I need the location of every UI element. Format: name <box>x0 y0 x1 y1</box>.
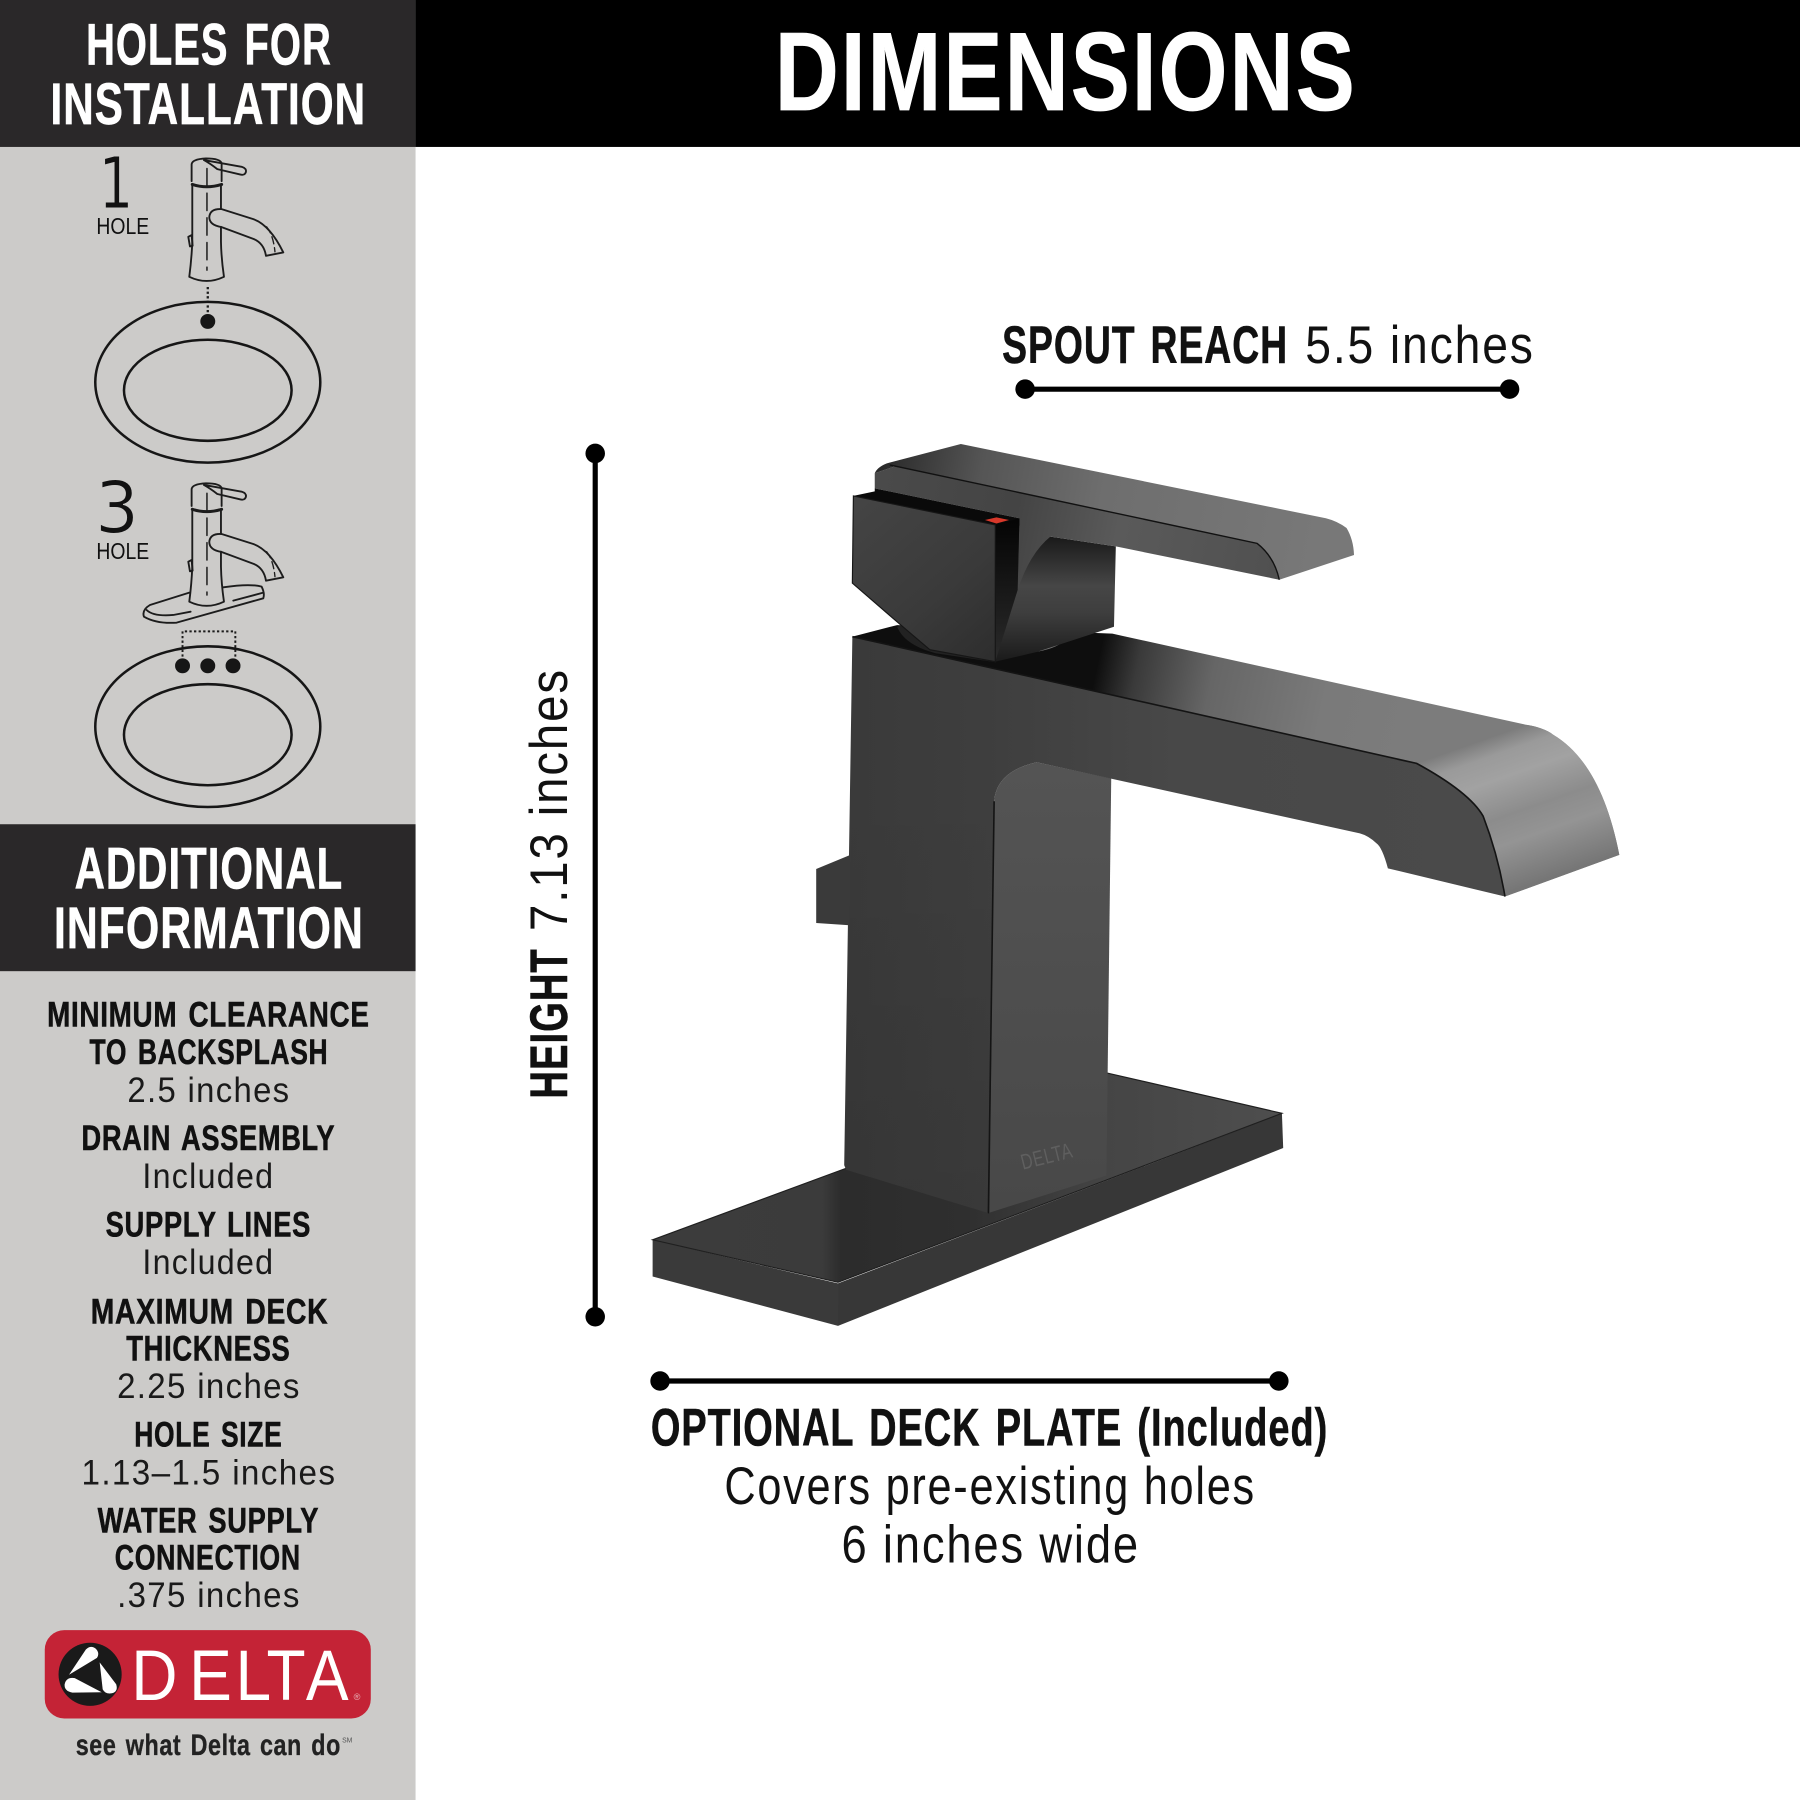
icon: one hole faucet and sink <box>95 142 320 463</box>
spec: minimum clearance <box>47 994 370 1110</box>
deck plate <box>653 1073 1283 1326</box>
spec: water supply connection <box>98 1501 319 1615</box>
spec: hole size: 1.13–1.5 inches <box>82 1452 336 1492</box>
spec: maximum deck thickness <box>91 1292 328 1406</box>
spec: minimum clearance: MINIMUM CLEARANCE <box>47 994 370 1034</box>
panel: left sidebar <box>0 0 416 1800</box>
logo: delta: DELTA <box>131 1637 349 1716</box>
spec: hole size <box>82 1414 336 1492</box>
body lower shading <box>844 781 994 1213</box>
icon: faucet with deck plate <box>143 483 283 623</box>
illustration: faucet <box>653 444 1619 1326</box>
heading: additional information <box>0 824 416 971</box>
dimension: spout reach: 5.5 inches <box>1305 316 1535 375</box>
tagline: see what Delta can do <box>76 1729 341 1762</box>
spec: drain assembly: Included <box>142 1156 274 1196</box>
heading: holes for installation <box>0 0 416 147</box>
spec: maximum deck thickness: 2.25 inches <box>117 1366 301 1406</box>
title: dimensions: DIMENSIONS <box>775 9 1357 134</box>
logo: delta <box>45 1630 371 1762</box>
dimension: optional deck plate: OPTIONAL DECK PLATE (Included) <box>651 1398 1328 1457</box>
dimension: height: 7.13 inches <box>520 668 579 931</box>
label: 1 hole: 1 <box>99 142 133 225</box>
arrow: spout reach line <box>1015 379 1519 399</box>
dimension: optional deck plate <box>650 1371 1328 1574</box>
spec: maximum deck thickness: MAXIMUM DECK <box>91 1292 328 1332</box>
body front and spout side <box>844 637 1505 1213</box>
label: 3 hole: 3 <box>95 467 139 550</box>
spout end highlight <box>1417 725 1619 897</box>
spec: supply lines: Included <box>142 1242 274 1282</box>
handle cube <box>852 496 995 662</box>
lever top <box>875 444 1354 580</box>
icon: dotted guide <box>207 287 209 315</box>
spec: supply lines: SUPPLY LINES <box>106 1204 311 1244</box>
spec: maximum deck thickness: THICKNESS <box>126 1328 290 1368</box>
icon: three hole faucet and sink <box>95 467 320 807</box>
dimension: spout reach: SPOUT REACH <box>1002 316 1288 375</box>
dimension: height: HEIGHT <box>520 948 579 1099</box>
spout edge lines <box>852 637 1505 1213</box>
label: 1 hole: HOLE <box>96 213 149 239</box>
heading: additional information: INFORMATION <box>54 896 364 961</box>
spec: hole size: HOLE SIZE <box>134 1414 282 1454</box>
arrow: deck plate line <box>650 1371 1289 1391</box>
logo: delta: ® <box>354 1692 361 1702</box>
icon: sink with three holes <box>95 646 320 807</box>
lever edge line <box>890 465 1279 580</box>
handle neck <box>995 518 1116 662</box>
spec: minimum clearance: 2.5 inches <box>127 1070 290 1110</box>
drain lift rod <box>816 855 849 925</box>
heading: holes for installation: HOLES FOR <box>86 12 332 77</box>
dimension: height <box>520 444 605 1326</box>
handle base disc <box>897 620 1061 662</box>
title: dimensions <box>416 0 1800 147</box>
dimension: optional deck plate: 6 inches wide <box>841 1515 1140 1574</box>
label: 3 hole: HOLE <box>96 538 149 564</box>
spec: supply lines <box>106 1204 311 1282</box>
text block: specifications list <box>47 994 370 1615</box>
arrow: height line <box>585 444 605 1326</box>
spec: minimum clearance: TO BACKSPLASH <box>90 1032 328 1072</box>
spec: drain assembly <box>82 1118 335 1196</box>
lever side <box>875 466 1279 590</box>
handle groove <box>853 488 1019 528</box>
icon: dotted guide <box>183 631 235 657</box>
handle chamfer <box>995 518 1019 662</box>
icon: sink with one hole <box>95 302 320 463</box>
dimension: optional deck plate: Covers pre-existing holes <box>724 1457 1256 1516</box>
body right face <box>987 762 1111 1213</box>
spout top surface <box>852 625 1619 897</box>
dimension: spout reach <box>1002 316 1535 399</box>
spec: water supply connection: WATER SUPPLY <box>98 1501 319 1541</box>
spec: water supply connection: CONNECTION <box>115 1537 301 1577</box>
red indicator <box>985 517 1009 523</box>
icon: delta triangle mark <box>59 1643 122 1706</box>
tagline: SM <box>342 1738 353 1745</box>
heading: additional information: ADDITIONAL <box>75 837 343 902</box>
icon: faucet line drawing <box>188 158 283 281</box>
spec: drain assembly: DRAIN ASSEMBLY <box>82 1118 335 1158</box>
spec: water supply connection: .375 inches <box>117 1575 301 1615</box>
engraved brand: DELTA <box>1018 1138 1075 1175</box>
heading: holes for installation: INSTALLATION <box>51 72 366 137</box>
